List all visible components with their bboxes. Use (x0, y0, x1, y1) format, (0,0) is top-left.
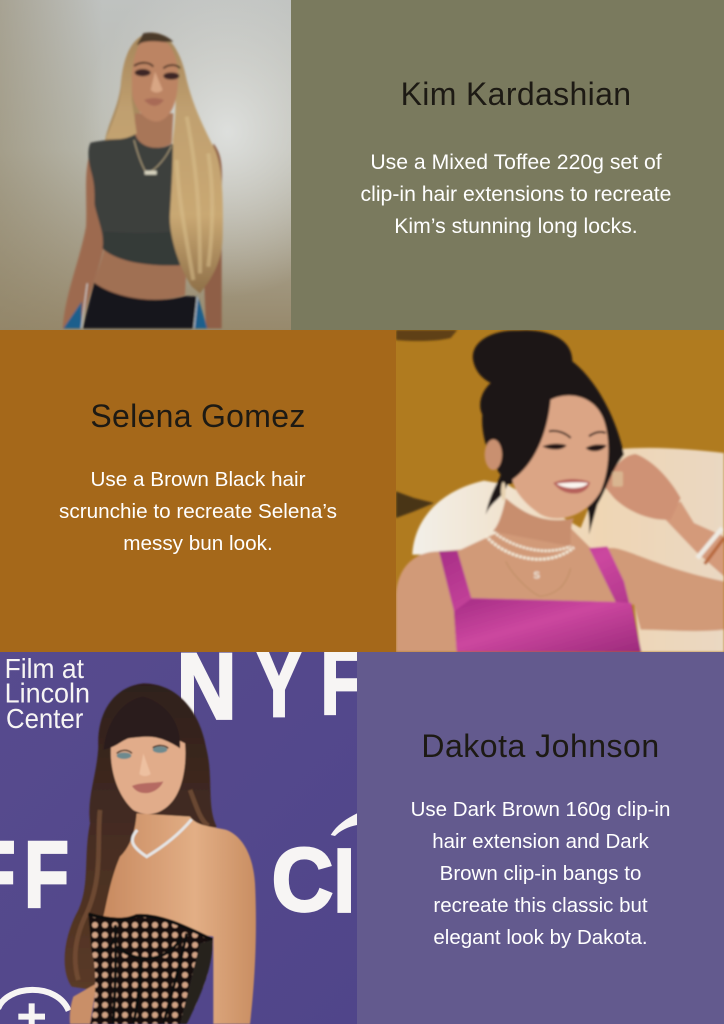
backdrop lettering: Center (6, 703, 83, 734)
back hair (105, 33, 153, 141)
bracelets (697, 528, 722, 558)
text block: Brown clip-in bangs to (440, 862, 641, 885)
neck (135, 113, 173, 148)
arms (63, 153, 104, 328)
text block (59, 468, 337, 555)
backdrop lettering: F (24, 823, 69, 927)
text block: Use Dark Brown 160g clip-in (411, 798, 670, 821)
text block (361, 151, 671, 238)
panel: Dakota Johnson (357, 652, 724, 1024)
heading: Dakota Johnson (421, 728, 660, 764)
hair back and bun (473, 330, 624, 535)
armchair (412, 448, 724, 652)
text block: messy bun look. (123, 532, 273, 555)
backdrop lettering (0, 629, 362, 932)
face (111, 733, 185, 814)
backdrop lettering: Lincoln (5, 677, 90, 708)
photo: Kim Kardashian (0, 0, 291, 330)
text block: Kim’s stunning long locks. (394, 215, 638, 238)
text block (411, 798, 670, 949)
logo arc (0, 990, 69, 1011)
text block: Use a Brown Black hair (90, 468, 306, 491)
panel: Selena Gomez (0, 330, 396, 652)
fringe (103, 697, 180, 750)
photo: Selena Gomez: S (533, 571, 540, 582)
necklaces (491, 530, 571, 551)
right arm raised (661, 501, 724, 576)
hair (65, 683, 217, 990)
corset (88, 913, 213, 1024)
left arm and chest (396, 528, 724, 652)
shoulders and torso (103, 813, 256, 1024)
neck (492, 498, 574, 546)
smile (553, 479, 590, 494)
front hair (106, 33, 223, 293)
text block: Use a Mixed Toffee 220g set of (370, 151, 662, 174)
text block: scrunchie to recreate Selena’s (59, 500, 337, 523)
face (132, 41, 178, 122)
eyes (117, 752, 131, 759)
hand (606, 454, 681, 520)
text block: elegant look by Dakota. (433, 926, 648, 949)
face (512, 395, 608, 519)
left arm (70, 983, 97, 1024)
trousers (83, 283, 197, 328)
dress (439, 546, 641, 652)
ear (485, 439, 502, 470)
heading: Kim Kardashian (401, 76, 631, 112)
accent mark (331, 813, 357, 836)
heading: Selena Gomez (90, 398, 306, 434)
text block: recreate this classic but (433, 894, 648, 917)
ring (612, 471, 623, 487)
backdrop lettering: C (272, 831, 333, 931)
text block: hair extension and Dark (432, 830, 649, 853)
photo: Dakota Johnson (0, 652, 357, 1024)
photo: Selena Gomez (396, 330, 724, 652)
shirt (88, 134, 180, 266)
necklace (134, 140, 171, 173)
text block: clip-in hair extensions to recreate (361, 183, 671, 206)
midriff (94, 250, 187, 300)
panel: Kim Kardashian (291, 0, 724, 330)
hair highlights (75, 790, 208, 980)
necklace (132, 819, 192, 857)
eyes (542, 444, 607, 451)
backdrop lettering: Film at (5, 653, 84, 684)
